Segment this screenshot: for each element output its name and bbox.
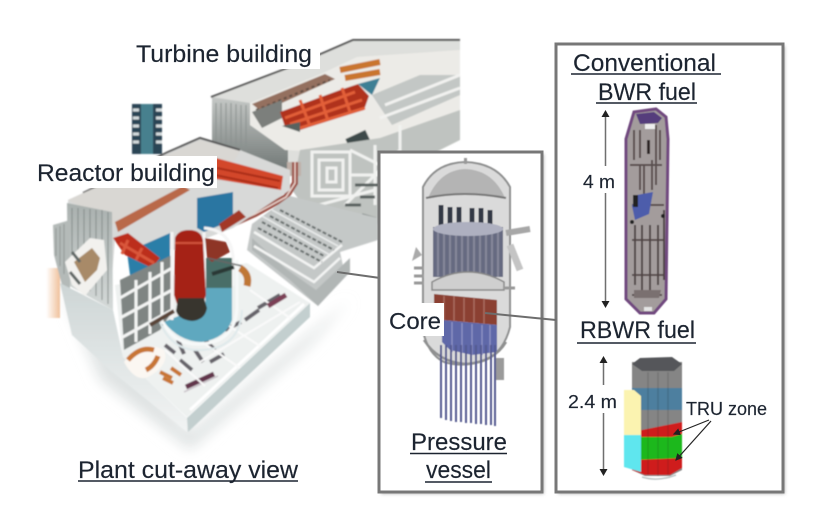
dimension arrow: 4 m: 4 m	[583, 172, 615, 192]
vessel shell	[423, 162, 510, 365]
heading: Pressure vessel: vessel	[426, 457, 491, 484]
hall floor	[250, 50, 460, 152]
caption: Plant cut-away view: Plant cut-away view	[78, 457, 299, 484]
illustration: RBWR fuel column	[624, 357, 682, 479]
stair structure	[292, 110, 460, 232]
side wall below	[60, 283, 187, 432]
turbine building	[211, 40, 460, 232]
faded orange edge	[46, 268, 60, 318]
containment pool	[160, 228, 242, 350]
heading: Conventional BWR fuel: Conventional	[573, 50, 716, 77]
illustration: conventional BWR fuel assembly	[626, 109, 668, 313]
reactor building	[53, 138, 290, 432]
upper pool	[197, 192, 233, 232]
label: Core	[381, 303, 444, 336]
dimension arrow: 2.4 m: 2.4 m	[568, 392, 617, 412]
ground shadow	[62, 290, 350, 450]
brown roof edge	[252, 74, 335, 112]
panel: fuel	[556, 44, 785, 494]
red steam pipes	[210, 158, 283, 190]
heading: Conventional BWR fuel	[571, 50, 721, 106]
steam nozzles	[506, 229, 530, 233]
turbine condenser racks	[247, 196, 378, 306]
callout: TRU zone: TRU zone	[686, 399, 767, 419]
illustration: reactor pressure vessel	[412, 158, 530, 426]
core red zone	[434, 294, 497, 325]
upper internals	[441, 205, 490, 236]
core blue zone	[442, 320, 497, 355]
dimension arrow: 4 m	[583, 110, 615, 308]
panel: plant cut-away illustration	[46, 40, 460, 450]
control rods	[441, 345, 495, 426]
steam line	[228, 162, 295, 226]
turbine machinery	[280, 84, 369, 130]
panel: pressure vessel	[379, 152, 544, 494]
icon: exhaust stack	[132, 104, 162, 154]
heading: Pressure vessel: Pressure	[411, 429, 507, 456]
label: Core: Core	[389, 308, 441, 334]
label: Reactor building: Reactor building	[37, 160, 215, 187]
heart-shaped window	[65, 238, 107, 296]
heading: Conventional BWR fuel: BWR fuel	[598, 79, 696, 106]
heading: Pressure vessel	[410, 429, 507, 484]
reactor vessel	[150, 210, 248, 325]
dimension arrow: 2.4 m	[568, 356, 617, 476]
slab and lower floors	[115, 255, 310, 432]
connector line: plant to pressure vessel	[337, 272, 380, 278]
callout: TRU zone	[674, 399, 767, 460]
heading: RBWR fuel: RBWR fuel	[580, 317, 695, 344]
connector line: core to fuel	[485, 313, 556, 320]
label: Turbine building: Turbine building	[136, 41, 312, 68]
